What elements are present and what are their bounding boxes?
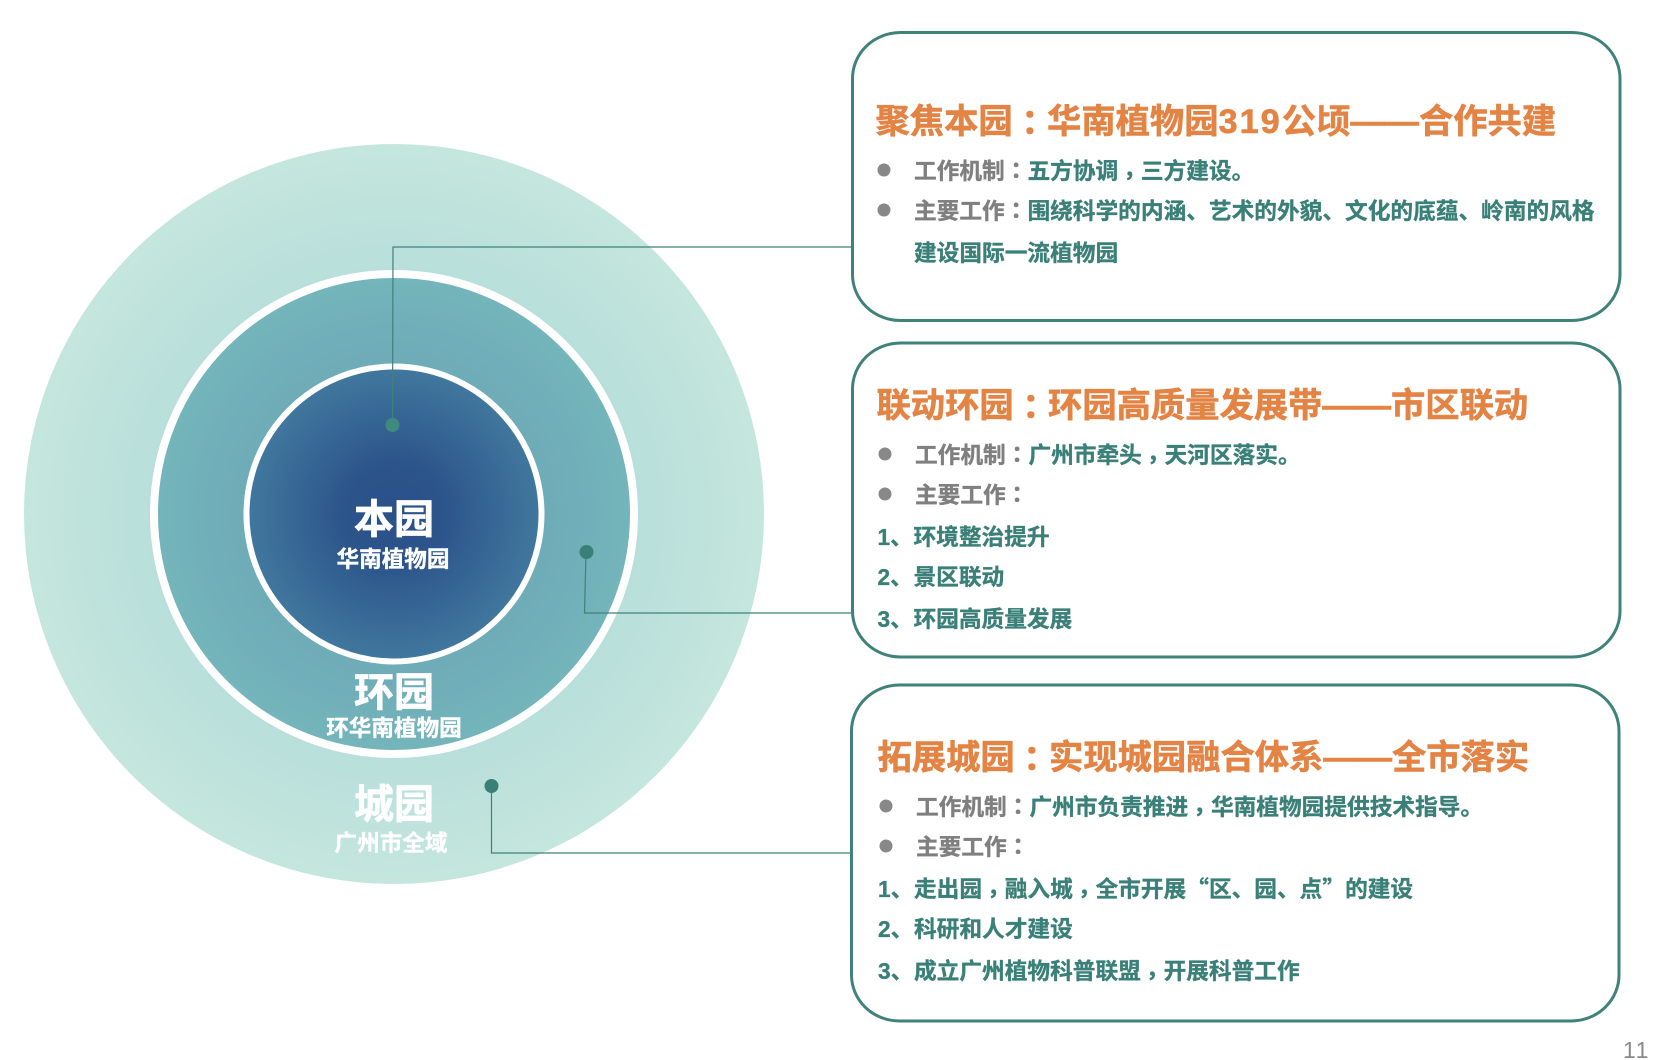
circle: inner core [246,366,542,662]
panel 1 main work continuation: 建设国际一流植物园 [914,240,1118,266]
panel 1 mechanism line: 工作机制：五方协调 [914,153,1118,186]
panel 2 mechanism line: ， [1142,442,1165,475]
panel 2 heading: 联动环园 [876,387,1014,425]
panel 2 bullet markers [878,448,892,500]
panel 3 item 1: ， [1073,876,1096,909]
panel 3 bullet markers [880,800,892,852]
panel 3 item 1: 全市开展 [1096,876,1186,902]
panel 3 item 2: 2、 [878,916,913,942]
panel 3 item 2: 科研和人才建设 [914,916,1073,942]
panel 3 heading: 拓展城园 [878,739,1015,777]
connector: core to panel 1 [386,247,852,432]
circle: middle ring [154,274,634,754]
circle: outer city ring [24,144,764,884]
panel 2 heading: ： [1014,379,1048,429]
panel 1 main work line: 主要工作：围绕科学的内涵、艺术的外貌、文化的底蕴、岭南的风格 [914,193,1595,226]
connector: city to panel 3 [484,779,852,853]
label: ring garden: 环华南植物园 [326,716,462,741]
panel 2 main work line: 主要工作： [915,477,1028,510]
panel 3 heading: ： [1015,731,1049,781]
label: core garden: 本园 [354,498,434,542]
panel 2 item 2: 2、 [878,564,913,590]
panel: focus on core garden [852,32,1620,320]
panel 1 bullet markers [878,164,890,216]
label: ring garden [326,671,462,741]
label: core garden [337,498,449,572]
panel 3 mechanism line: ， [1188,794,1211,827]
panel 3 mechanism line: 华南植物园提供技术指导。 [1211,794,1483,820]
panel: linked ring garden [852,343,1620,657]
panel 1 mechanism line: 三方建设。 [1141,158,1254,184]
panel 3 item 1: 1、 [878,876,913,902]
panel 3 item 1: ， [982,876,1005,909]
panel 1 heading: ： [1013,95,1047,145]
panel 2 item 3: 3、 [878,606,913,632]
panel 2 item 2: 景区联动 [914,564,1004,590]
panel 3 item 3: 开展科普工作 [1164,958,1300,984]
panel 2 mechanism line: 工作机制：广州市牵头 [915,437,1142,470]
panel 3 item 3: 3、 [878,958,913,984]
label: city garden: 城园 [354,783,434,827]
panel 1 heading: 华南植物园 [1047,103,1219,141]
label: city garden: 广州市全域 [335,830,448,856]
panel: expand city garden [852,685,1619,1021]
panel 3 item 1: “区、园、点”的建设 [1186,871,1413,904]
panel 1 mechanism line: ， [1118,158,1141,191]
panel 3 main work line: 主要工作： [916,829,1029,862]
panel 3 item 1: 融入城 [1005,876,1073,902]
panel 3 mechanism line: 工作机制：广州市负责推进 [916,789,1188,822]
panel 1 heading: 319公顷——合作共建 [1219,103,1556,141]
connector: ring to panel 2 [580,545,852,613]
panel 1 heading: 聚焦本园 [876,103,1013,141]
panel 3 item 3: ， [1141,958,1164,991]
panel 2 item 1: 环境整治提升 [914,524,1050,550]
label: core garden: 华南植物园 [337,547,449,572]
panel 2 item 3: 环园高质量发展 [914,606,1072,632]
panel 2 heading: 环园高质量发展带——市区联动 [1048,387,1528,425]
label: city garden [335,783,448,856]
panel 2 item 1: 1、 [878,524,913,550]
panel 3 item 1: 走出园 [914,871,1413,909]
panel 3 heading: 实现城园融合体系——全市落实 [1049,739,1529,777]
panel 2 mechanism line: 天河区落实。 [1165,442,1301,468]
label: ring garden: 环园 [354,671,434,715]
panel 3 item 3: 成立广州植物科普联盟 [914,958,1300,991]
